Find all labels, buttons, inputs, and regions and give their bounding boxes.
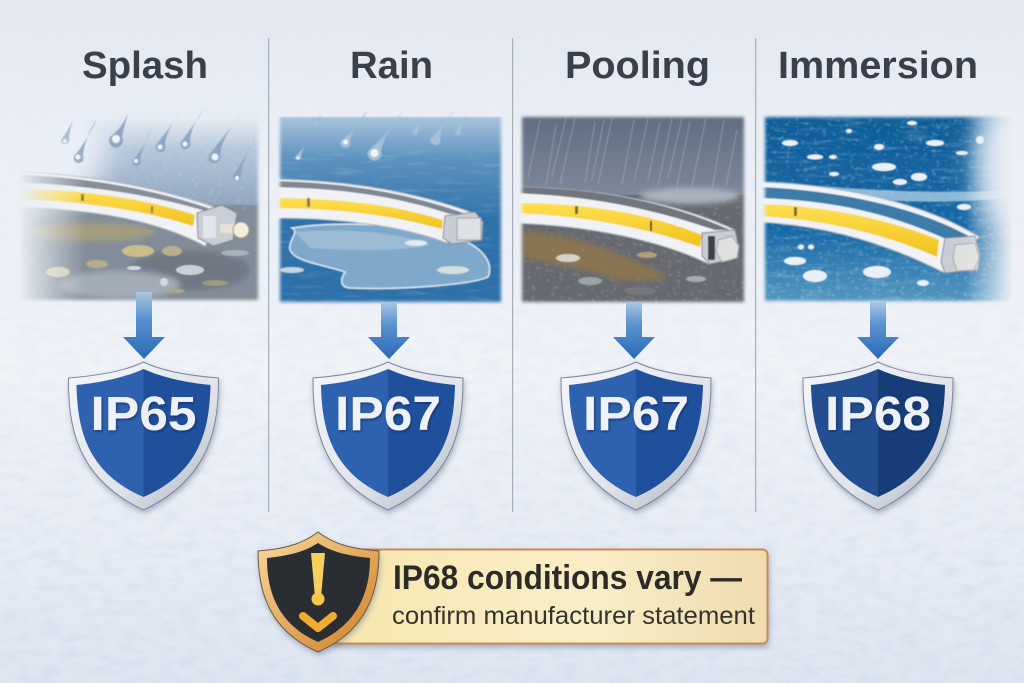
- callout text: subline: confirm manufacturer statement: [392, 602, 755, 630]
- badge: IP67 shield (pooling): IP67: [583, 388, 689, 441]
- badge: IP67 shield (rain): [313, 362, 463, 510]
- muddy ground: [522, 232, 706, 295]
- heading: Rain: Rain: [350, 45, 433, 87]
- drop highlights: [296, 140, 378, 160]
- heading: Pooling: Pooling: [565, 45, 710, 87]
- arrow: immersion to IP68: [857, 302, 899, 359]
- drop highlights: [63, 135, 239, 180]
- badge: IP68 shield: IP68: [825, 388, 931, 441]
- panel: pooling scene: [515, 110, 750, 310]
- puddles and stones: [46, 245, 249, 293]
- callout text: headline: IP68 conditions vary —: [393, 559, 742, 597]
- callout banner: [330, 550, 768, 644]
- rain streaks: [528, 118, 737, 190]
- panel: rain scene: [270, 110, 510, 307]
- LED strip: rain: [270, 179, 483, 244]
- panel: immersion scene: [762, 114, 1012, 304]
- rain drops: [295, 110, 467, 161]
- arrow: rain to IP67: [368, 302, 410, 359]
- badge: IP67 shield (rain): IP67: [335, 388, 441, 441]
- puddle: [290, 224, 490, 288]
- LED strip: pooling: [515, 187, 739, 264]
- arrow: pooling to IP67: [613, 302, 655, 359]
- badge: IP67 shield (pooling): [561, 362, 711, 510]
- callout: IP68 warning: [258, 532, 768, 652]
- heading: Splash: Splash: [82, 45, 208, 87]
- icon: warning shield: [258, 532, 379, 652]
- badge: IP68 shield: [803, 362, 953, 510]
- badge: IP65 shield: IP65: [91, 388, 196, 441]
- rain drops: [61, 108, 257, 180]
- LED strip: immersion: [760, 182, 980, 273]
- heading: Immersion: Immersion: [778, 45, 978, 87]
- badge: IP65 shield: [68, 362, 218, 510]
- arrow: splash to IP65: [123, 292, 165, 359]
- LED strip: splash: [10, 171, 249, 246]
- panel: splash scene: [20, 109, 260, 302]
- air bubbles: [782, 121, 984, 286]
